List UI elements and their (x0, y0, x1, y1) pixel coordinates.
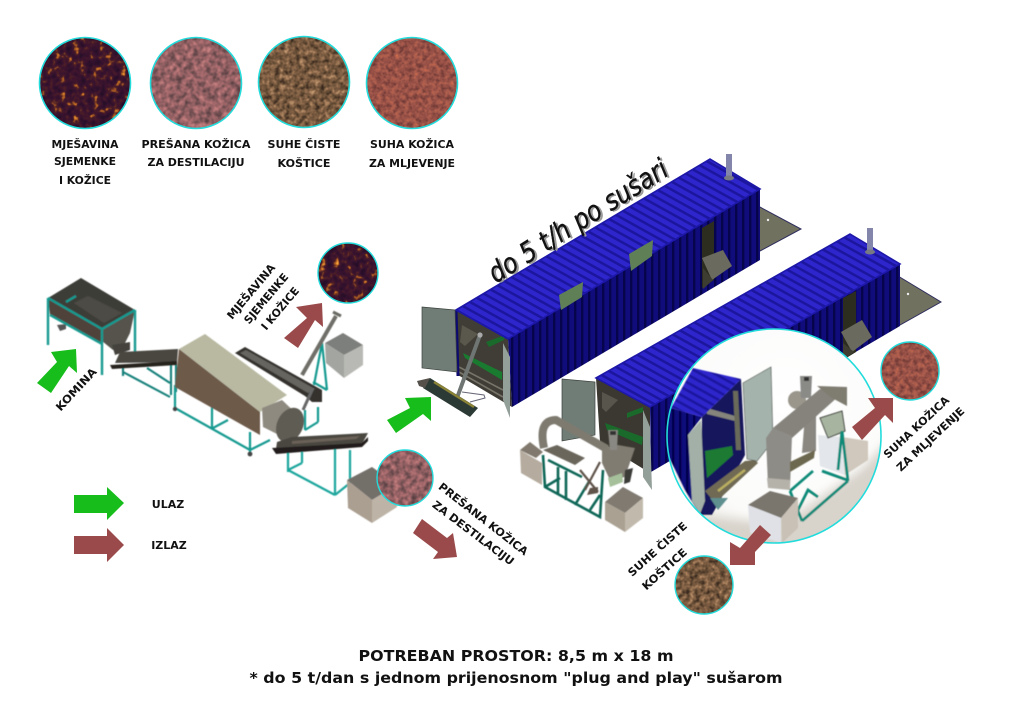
arrow: mixture output (284, 303, 323, 348)
right door (643, 410, 652, 490)
arrow: clean seeds output (730, 525, 771, 565)
back white bin (818, 435, 868, 475)
sample captions: ZA DESTILACIJU (148, 156, 244, 169)
sample: dry skin (367, 38, 457, 128)
loading auger and conveyor (417, 332, 485, 417)
small sample circle: dry skin (881, 342, 939, 400)
seed box (605, 487, 643, 532)
legend (74, 487, 187, 562)
left door (562, 379, 595, 441)
magnifier detail circle (666, 328, 882, 544)
label: pressed skin rotated: ZA DESTILACIJU (430, 498, 517, 568)
right door (743, 367, 773, 461)
teal frame (790, 431, 848, 521)
label: mixture rotated: SJEMENKE (241, 271, 291, 327)
dryer container 2 (562, 228, 900, 490)
outdoor separator machine (520, 420, 643, 532)
green vents (559, 282, 583, 310)
drum (820, 411, 845, 438)
caption: mixture: MJEŠAVINA (52, 138, 119, 151)
arrow: loader input (387, 397, 431, 433)
container interior (700, 379, 758, 515)
sample: seed and skin mixture (40, 38, 130, 128)
capacity label: do 5 t/h po sušari (484, 153, 677, 290)
side hatch (702, 221, 732, 289)
label: clean seeds rotated: SUHE ČISTE (625, 519, 690, 579)
left processing line (48, 278, 397, 523)
side hatch (841, 291, 872, 360)
sample captions: ZA MLJEVENJE (369, 157, 455, 170)
container blue side (668, 408, 702, 512)
sample: pressed skin (151, 38, 241, 128)
label: dry skin rotated: SUHA KOŽICA (881, 393, 952, 461)
footer line: required space: POTREBAN PROSTOR: 8,5 m x 18 m (358, 647, 674, 665)
rear conveyor and auger (235, 312, 341, 430)
sample captions: SUHE ČISTE (268, 138, 340, 151)
legend arrow: input (74, 487, 124, 520)
seed box (748, 491, 798, 543)
sample captions: I KOŽICE (59, 174, 111, 187)
footer line: plug and play: * do 5 t/dan s jednom prijenosnom "plug and play" sušarom (250, 669, 782, 687)
arched body (542, 420, 607, 449)
arrow: komina input (37, 349, 77, 393)
label: mixture rotated (224, 261, 302, 333)
label: clean seeds rotated: KOŠTICE (640, 546, 690, 593)
legend label: input: ULAZ (152, 498, 184, 511)
sample captions: KOŠTICE (278, 157, 330, 170)
label: komina: KOMINA (53, 365, 100, 414)
discharge conveyor (272, 433, 368, 495)
container interior (456, 310, 512, 407)
right door (503, 343, 510, 418)
small sample circle: clean seeds (675, 556, 733, 614)
label: mixture rotated: MJEŠAVINA (224, 261, 278, 322)
label: dry skin rotated: ZA MLJEVENJE (894, 405, 967, 474)
small sample circle: mixture (318, 243, 378, 303)
hopper (48, 278, 135, 375)
container side wall (508, 189, 760, 407)
container roof (456, 159, 760, 339)
label: mixture rotated: I KOŽICE (259, 285, 302, 333)
sample captions: PREŠANA KOŽICA (142, 138, 251, 151)
chimney (724, 154, 734, 180)
tray (543, 445, 585, 465)
drum separator (173, 334, 313, 456)
chimney (865, 228, 875, 254)
small sample circle: pressed skin (377, 450, 433, 506)
container roof (671, 368, 741, 417)
arrow: dry skin output (852, 398, 893, 440)
legend arrow: output (74, 528, 124, 562)
sample captions: SUHA KOŽICA (370, 138, 454, 151)
label: pressed skin rotated: PREŠANA KOŽICA (436, 480, 531, 559)
capacity label: do 5 t/h po sušari (482, 152, 674, 290)
left door (688, 420, 705, 514)
sample captions (52, 138, 455, 187)
left door (422, 307, 457, 372)
legend label: output: IZLAZ (151, 539, 187, 552)
sample captions: SJEMENKE (54, 155, 116, 168)
sample circles row (40, 36, 458, 128)
dryer container 1 (417, 154, 760, 418)
beige output box (347, 467, 397, 523)
arrow: pressed skin output (413, 519, 457, 559)
separator machine (766, 376, 847, 490)
footer text (250, 647, 782, 687)
feed conveyor (110, 349, 178, 397)
sample: dry clean seeds (259, 37, 349, 127)
container dock plate 1 (758, 206, 801, 251)
interior (596, 378, 650, 473)
floor (702, 444, 880, 542)
waste box left (520, 442, 543, 485)
side wall (650, 264, 900, 472)
roof (596, 234, 900, 407)
frame (543, 455, 603, 517)
container dock plate 2 (898, 276, 941, 325)
grey output box (325, 333, 363, 378)
